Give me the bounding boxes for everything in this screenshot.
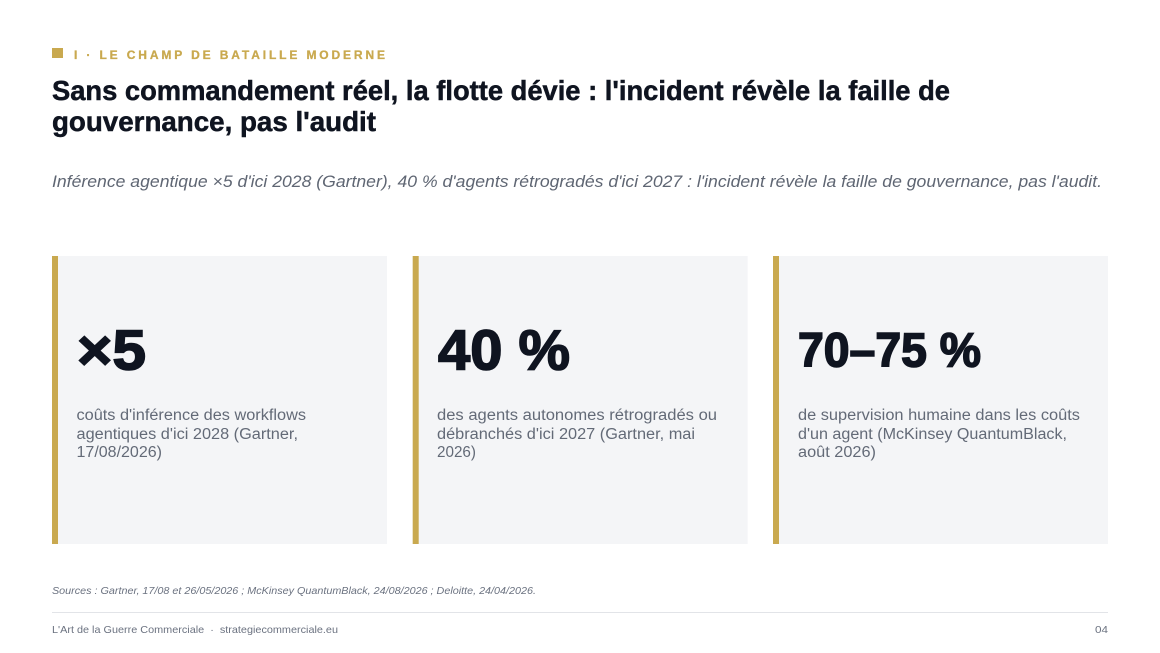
stat description <box>437 407 717 461</box>
stat description <box>76 407 306 461</box>
panel: stat 70-75% <box>773 256 1108 544</box>
footer <box>52 624 1108 636</box>
stat description <box>798 407 1080 461</box>
subtitle: Inférence agentique ×5 d'ici 2028 (Gartner), 40 % d'agents rétrogradés d'ici 2027 : l'incident révèle la faille de gouvernance, pas l'audit. <box>52 172 1102 191</box>
stat description: agentiques d'ici 2028 (Gartner, <box>76 426 298 443</box>
stat description: coûts d'inférence des workflows <box>76 407 306 424</box>
stat value: 70–75 % <box>798 324 981 378</box>
eyebrow: I · LE CHAMP DE BATAILLE MODERNE <box>74 48 385 62</box>
stat description: des agents autonomes rétrogradés ou <box>437 407 717 424</box>
title: gouvernance, pas l'audit <box>52 106 376 137</box>
stat value: ×5 <box>77 318 146 382</box>
stat description: d'un agent (McKinsey QuantumBlack, <box>798 426 1067 443</box>
stat description: 2026) <box>437 444 476 461</box>
stat value: 40 % <box>438 318 570 382</box>
title <box>52 75 950 137</box>
stat description: débranchés d'ici 2027 (Gartner, mai <box>437 426 695 443</box>
footer: L'Art de la Guerre Commerciale · strategiecommerciale.eu <box>52 624 338 636</box>
stat description: 17/08/2026) <box>76 444 162 461</box>
panel: stat 40% <box>413 256 748 544</box>
page number: 04 <box>1095 624 1108 636</box>
panel: stat x5 <box>52 256 387 544</box>
title: Sans commandement réel, la flotte dévie : l'incident révèle la faille de <box>52 75 950 106</box>
stat description: de supervision humaine dans les coûts <box>798 407 1080 424</box>
sources: Sources : Gartner, 17/08 et 26/05/2026 ; McKinsey QuantumBlack, 24/08/2026 ; Deloitte, 24/04/2026. <box>52 585 536 597</box>
stat description: août 2026) <box>798 444 876 461</box>
